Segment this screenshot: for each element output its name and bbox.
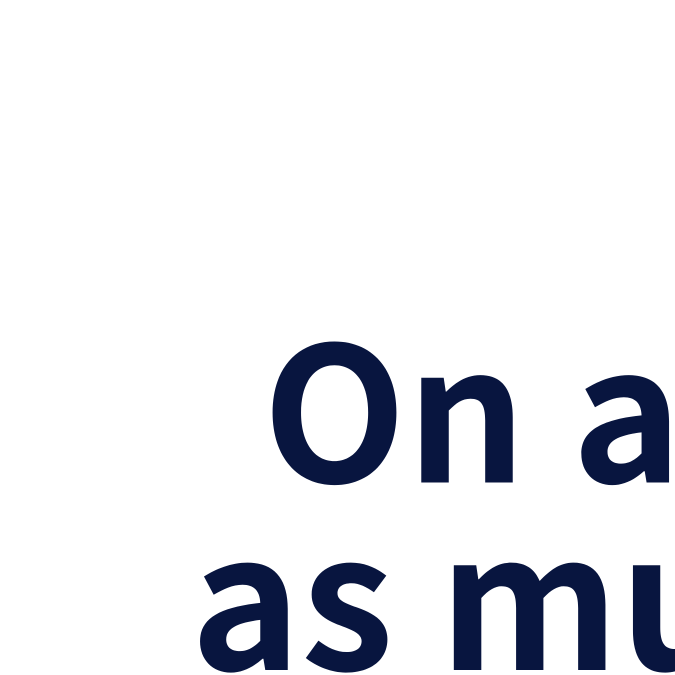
title: first line: On a [262,266,675,536]
